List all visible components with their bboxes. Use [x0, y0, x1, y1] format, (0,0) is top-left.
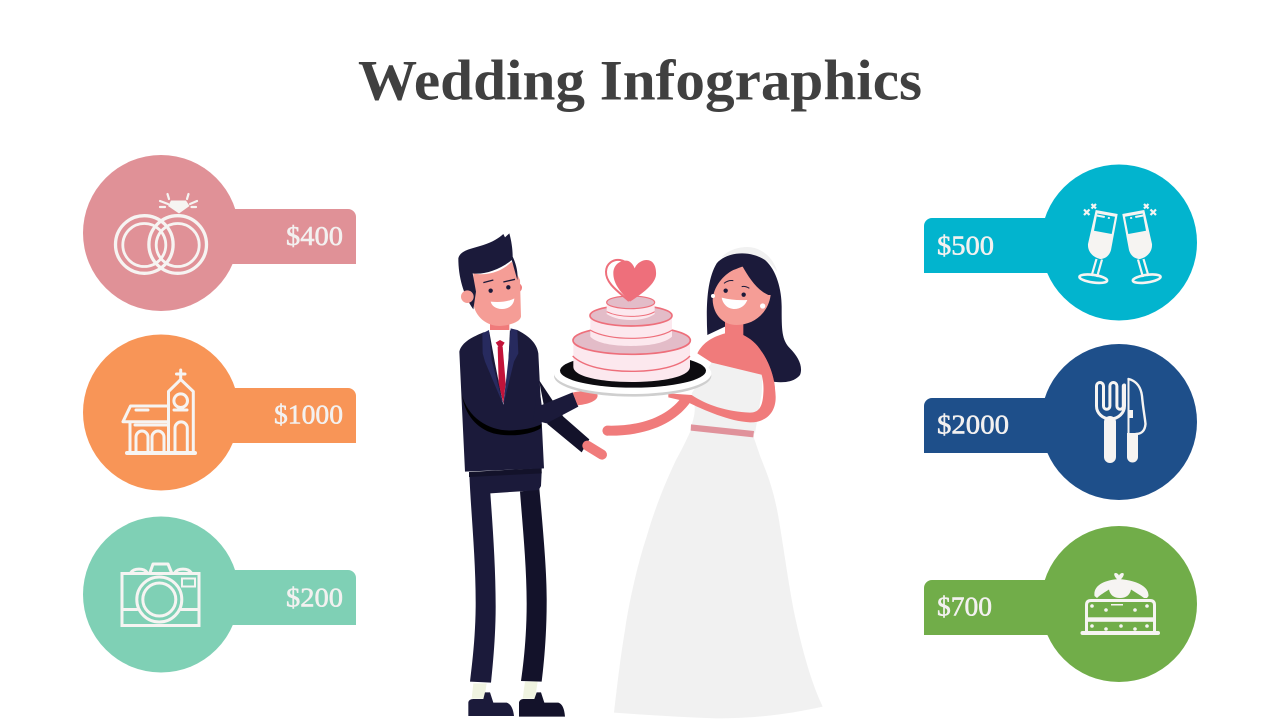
groom lower body	[468, 468, 565, 717]
icon: fork and knife	[1096, 378, 1146, 463]
price: $200: $200	[286, 582, 343, 612]
wedding cake	[573, 296, 690, 382]
heart topper	[606, 260, 656, 302]
title: Wedding Infographics	[358, 50, 922, 112]
price: $2000: $2000	[937, 410, 1009, 440]
illustration: couple with cake	[458, 233, 823, 718]
groom lower arm	[539, 380, 589, 452]
bride neck and shoulders	[697, 322, 775, 390]
groom jacket	[459, 328, 578, 472]
panel: cake $700	[924, 526, 1197, 682]
panel: rings $400	[83, 155, 356, 311]
bride arms	[602, 352, 776, 436]
upper figures	[458, 233, 801, 472]
panel: champagne $500	[924, 164, 1197, 320]
icon: camera	[122, 564, 199, 626]
cake plate	[554, 353, 711, 397]
price: $1000: $1000	[274, 400, 343, 430]
icon: cake	[1080, 573, 1160, 635]
groom head	[458, 233, 522, 330]
panel: catering $2000	[924, 344, 1197, 500]
price: $400: $400	[286, 221, 343, 251]
bride skirt	[614, 430, 823, 718]
panel: camera $200	[83, 516, 356, 672]
bride sash	[691, 424, 754, 437]
price: $700: $700	[937, 592, 992, 622]
icon: church	[123, 370, 197, 455]
icon: champagne glasses	[1079, 204, 1161, 284]
bride dress bodice	[691, 363, 763, 433]
panel: church $1000	[83, 334, 356, 490]
bride face	[711, 267, 771, 325]
groom hands	[573, 391, 602, 455]
icon: wedding rings	[116, 194, 206, 273]
bride hair and veil	[707, 247, 801, 382]
price: $500: $500	[937, 230, 994, 260]
